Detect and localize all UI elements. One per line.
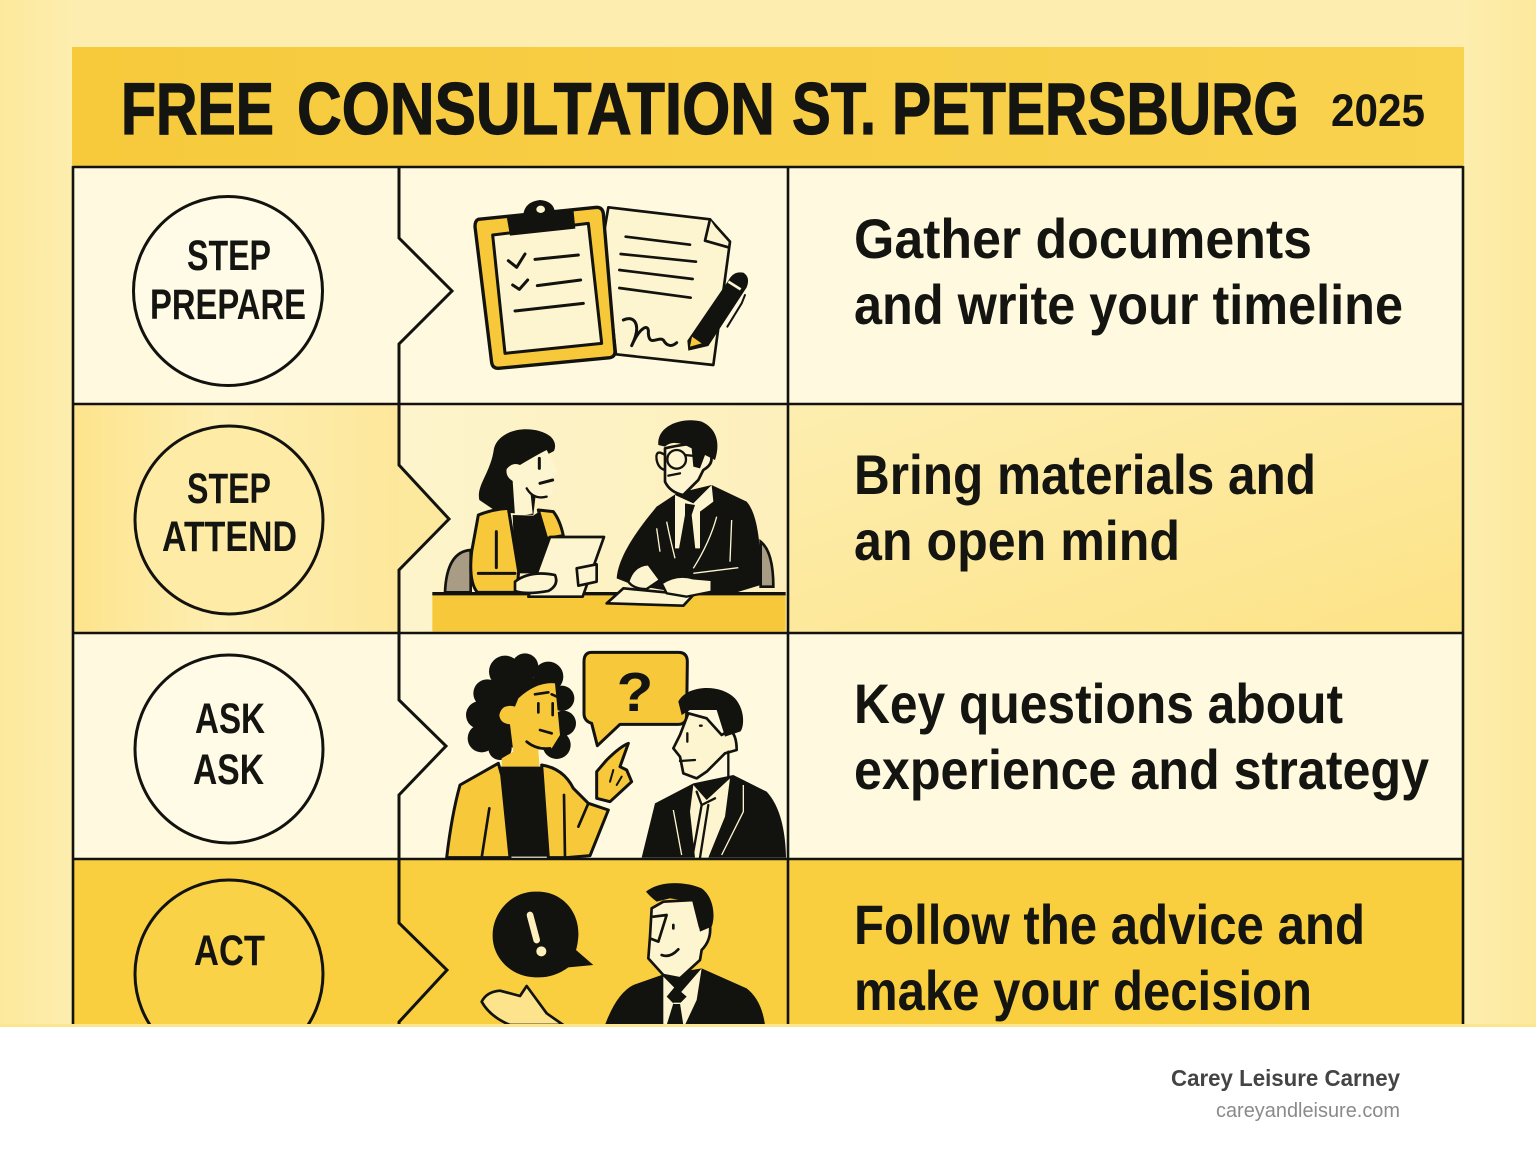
arrow: chevron divider row 4 (399, 860, 447, 1030)
arrow: chevron divider row 2 (399, 405, 449, 633)
man (642, 688, 786, 858)
papers and hands (515, 537, 693, 606)
circle badge: ask (135, 655, 323, 843)
desk (432, 594, 786, 632)
footer (0, 1027, 1536, 1154)
text block: attend description (854, 443, 1316, 572)
chairs (445, 542, 773, 592)
circle badge: ask: ASK (193, 746, 264, 794)
panel: row 4 act (74, 860, 1462, 1024)
icon: clipboard and signed document (475, 200, 748, 368)
circle badge: step prepare: STEP (187, 232, 271, 280)
header band (72, 47, 1464, 167)
man (617, 420, 761, 597)
circle badge: act: ACT (194, 927, 265, 975)
text block: ask description: experience and strategy (854, 738, 1429, 801)
speech bubble: exclamation (493, 892, 593, 977)
panel: row 2 attend (73, 405, 1463, 633)
title: CONSULTATION (297, 69, 775, 150)
man (605, 883, 765, 1025)
text block: act description: make your decision (854, 959, 1312, 1022)
arrow: chevron divider row 1 (399, 167, 452, 404)
text block: attend description: an open mind (854, 509, 1180, 572)
circle badge: act (134, 878, 324, 1024)
circle badge: step attend (135, 426, 323, 614)
year label: 2025 (1331, 85, 1425, 136)
panel: row 3 ask (73, 633, 1463, 860)
speech bubble: question mark: ? (617, 661, 653, 723)
illustration: woman and man at a desk (432, 420, 786, 632)
woman (447, 653, 632, 858)
text block: attend description: Bring materials and (854, 443, 1316, 506)
panel: row 1 prepare (73, 167, 1463, 405)
text block: ask description: Key questions about (854, 672, 1343, 735)
footer brand name: Carey Leisure Carney (1171, 1065, 1400, 1091)
speech bubble: question mark (584, 652, 687, 746)
text block: ask description (854, 672, 1429, 801)
title: FREE (121, 69, 274, 150)
circle badge: step prepare: PREPARE (150, 281, 306, 329)
open hand (482, 986, 563, 1025)
illustration: woman asking a man a question (447, 652, 786, 858)
text block: act description (854, 893, 1365, 1022)
illustration: advice bubble, hand and smiling man (482, 883, 765, 1025)
text block: prepare description (854, 207, 1403, 336)
text block: prepare description: Gather documents (854, 207, 1312, 270)
circle badge: step attend: STEP (187, 465, 271, 513)
arrow: chevron divider row 3 (399, 633, 446, 859)
text block: prepare description: and write your timeline (854, 273, 1403, 336)
title: ST. (792, 69, 876, 150)
circle badge: ask: ASK (195, 695, 265, 743)
text block: act description: Follow the advice and (854, 893, 1365, 956)
footer website: careyandleisure.com (1216, 1100, 1400, 1122)
woman (471, 429, 563, 592)
circle badge: step attend: ATTEND (162, 513, 297, 561)
title: PETERSBURG (892, 69, 1299, 150)
circle badge: step prepare (134, 196, 322, 386)
